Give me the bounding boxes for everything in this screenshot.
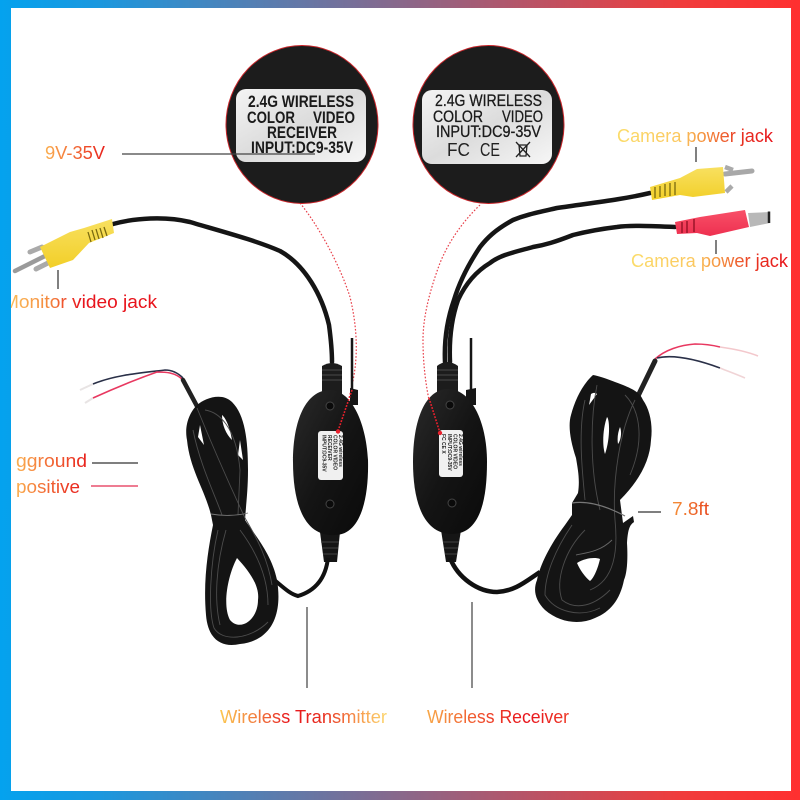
red dotted callout: receiver label to magnified view bbox=[423, 205, 480, 433]
label: wireless transmitter: Wireless Transmitter bbox=[220, 706, 387, 727]
leader line: wireless receiver bbox=[471, 602, 473, 688]
magnified label: transmitter: VIDEO bbox=[313, 109, 355, 127]
receiver callout inside module bbox=[429, 398, 440, 433]
leader line: camera power jack, top bbox=[695, 147, 697, 162]
magnified label: transmitter: INPUT:DC9-35V bbox=[251, 139, 353, 157]
wireless receiver module: COLOR VIDEO bbox=[452, 434, 458, 469]
label: camera power jack, bottom: Camera power jack bbox=[631, 250, 789, 271]
magnified label: receiver: FC bbox=[447, 140, 470, 160]
transmitter video cable bbox=[113, 218, 332, 362]
camera RCA plug bbox=[650, 167, 752, 200]
leader line: monitor video jack bbox=[57, 270, 59, 289]
magnified label: receiver: CE bbox=[480, 140, 500, 160]
receiver camera cables bbox=[445, 193, 675, 362]
leader line: ground bbox=[92, 462, 138, 464]
wireless transmitter module: COLOR VIDEO bbox=[332, 435, 338, 470]
magnified label: transmitter bbox=[226, 46, 378, 204]
magnified label: receiver: INPUT:DC9-35V bbox=[436, 123, 541, 141]
transmitter cable to coil bbox=[272, 558, 328, 596]
right bare wires bbox=[655, 344, 758, 378]
magnified label: receiver: 2.4G WIRELESS bbox=[435, 92, 542, 110]
magnified label: transmitter: 2.4G WIRELESS bbox=[248, 93, 354, 111]
left bare wires bbox=[80, 370, 183, 403]
wireless transmitter module bbox=[293, 338, 368, 562]
magnified label: receiver: COLOR bbox=[433, 108, 483, 126]
wireless receiver module: 2.4G wireless bbox=[457, 434, 463, 466]
transmitter callout inside module bbox=[338, 390, 352, 431]
camera DC power plug bbox=[675, 210, 770, 236]
wireless receiver module bbox=[413, 338, 487, 562]
label: wireless receiver: Wireless Receiver bbox=[427, 706, 569, 727]
magnified label: transmitter: COLOR bbox=[247, 109, 295, 127]
magnified label: receiver bbox=[413, 46, 564, 204]
right cable coil bbox=[535, 361, 655, 622]
label: 9V-35V: 9V-35V bbox=[45, 142, 106, 163]
label: monitor video jack: Monitor video jack bbox=[3, 291, 158, 312]
leader line: 9V-35V bbox=[122, 153, 315, 155]
transmitter label dot bbox=[336, 429, 340, 434]
wireless transmitter module: RECEIVER bbox=[326, 435, 332, 461]
magnified label: transmitter: RECEIVER bbox=[267, 124, 337, 142]
leader line: cable length bbox=[638, 511, 661, 513]
label: positive: positive bbox=[16, 476, 80, 497]
wireless transmitter module: 2.4G wireless bbox=[337, 435, 343, 467]
wireless receiver module: FC CE X bbox=[440, 434, 446, 454]
label: cable length 7.8ft: 7.8ft bbox=[672, 498, 709, 519]
wireless receiver module: INPUT:DC9-35V bbox=[446, 434, 452, 471]
magnified label: receiver: VIDEO bbox=[502, 108, 543, 126]
wireless transmitter module: INPUT:DC9-35V bbox=[320, 435, 326, 472]
leader line: camera power jack, bottom bbox=[715, 240, 717, 254]
label: ground: gground bbox=[16, 450, 87, 471]
leader line: wireless transmitter bbox=[306, 607, 308, 688]
receiver cable to coil bbox=[450, 558, 540, 592]
label: camera power jack, top: Camera power jack bbox=[617, 125, 774, 146]
red dotted callout: transmitter label to magnified view bbox=[300, 203, 356, 431]
leader line: positive bbox=[91, 485, 138, 487]
monitor RCA plug bbox=[15, 219, 114, 271]
receiver label dot bbox=[438, 431, 442, 435]
left cable coil bbox=[183, 380, 278, 645]
